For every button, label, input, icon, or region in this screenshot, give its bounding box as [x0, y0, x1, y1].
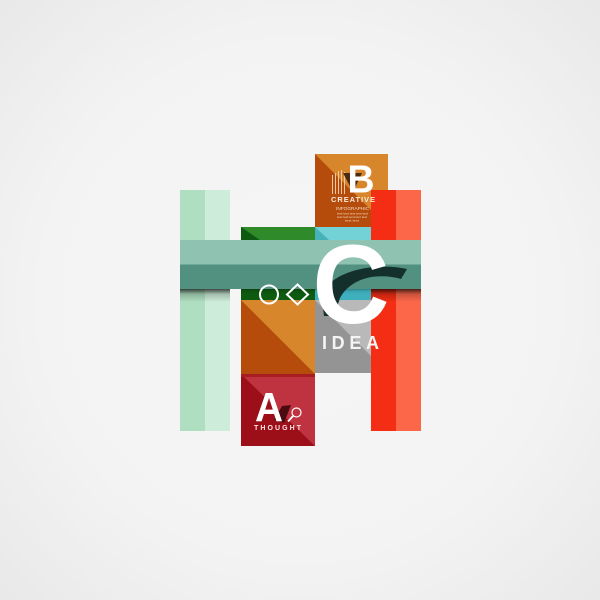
icon: dark triangle behind B: [343, 173, 362, 192]
label: IDEA: IDEA: [322, 333, 379, 353]
icon: diamond: [287, 284, 308, 304]
panel: orange square: [241, 300, 315, 374]
label: INFOGRAPHIC: INFOGRAPHIC: [336, 206, 370, 211]
letter C: C: [312, 222, 390, 347]
icon: magnifier: [288, 408, 301, 422]
panel: grey square: [315, 300, 371, 373]
panel: A thought square: [241, 374, 315, 446]
label: THOUGHT: THOUGHT: [254, 425, 302, 432]
panel: horizontal teal band: [180, 240, 421, 289]
panel: B square background: [315, 154, 388, 227]
letter A: A: [255, 384, 283, 430]
icon: vertical lines: [332, 170, 344, 194]
red bar shadow: [371, 289, 421, 302]
panel: red vertical bar: [371, 190, 421, 431]
icon: dark swoosh behind A: [274, 405, 291, 423]
panel: green square: [241, 227, 315, 300]
small print line three: text text: [345, 218, 359, 222]
label: CREATIVE: CREATIVE: [331, 195, 375, 204]
small print line two: text text text text text: [337, 215, 367, 219]
icon: circle: [260, 286, 278, 304]
B square content: [331, 158, 375, 222]
panel: teal square: [315, 227, 371, 300]
letter B: B: [348, 158, 374, 202]
panel: mint vertical bar: [180, 190, 230, 431]
squares shadow: [241, 289, 371, 294]
small print: text text text text text: [337, 212, 368, 216]
icon: dark swoosh behind C: [322, 267, 407, 316]
mint bar shadow: [180, 289, 230, 302]
